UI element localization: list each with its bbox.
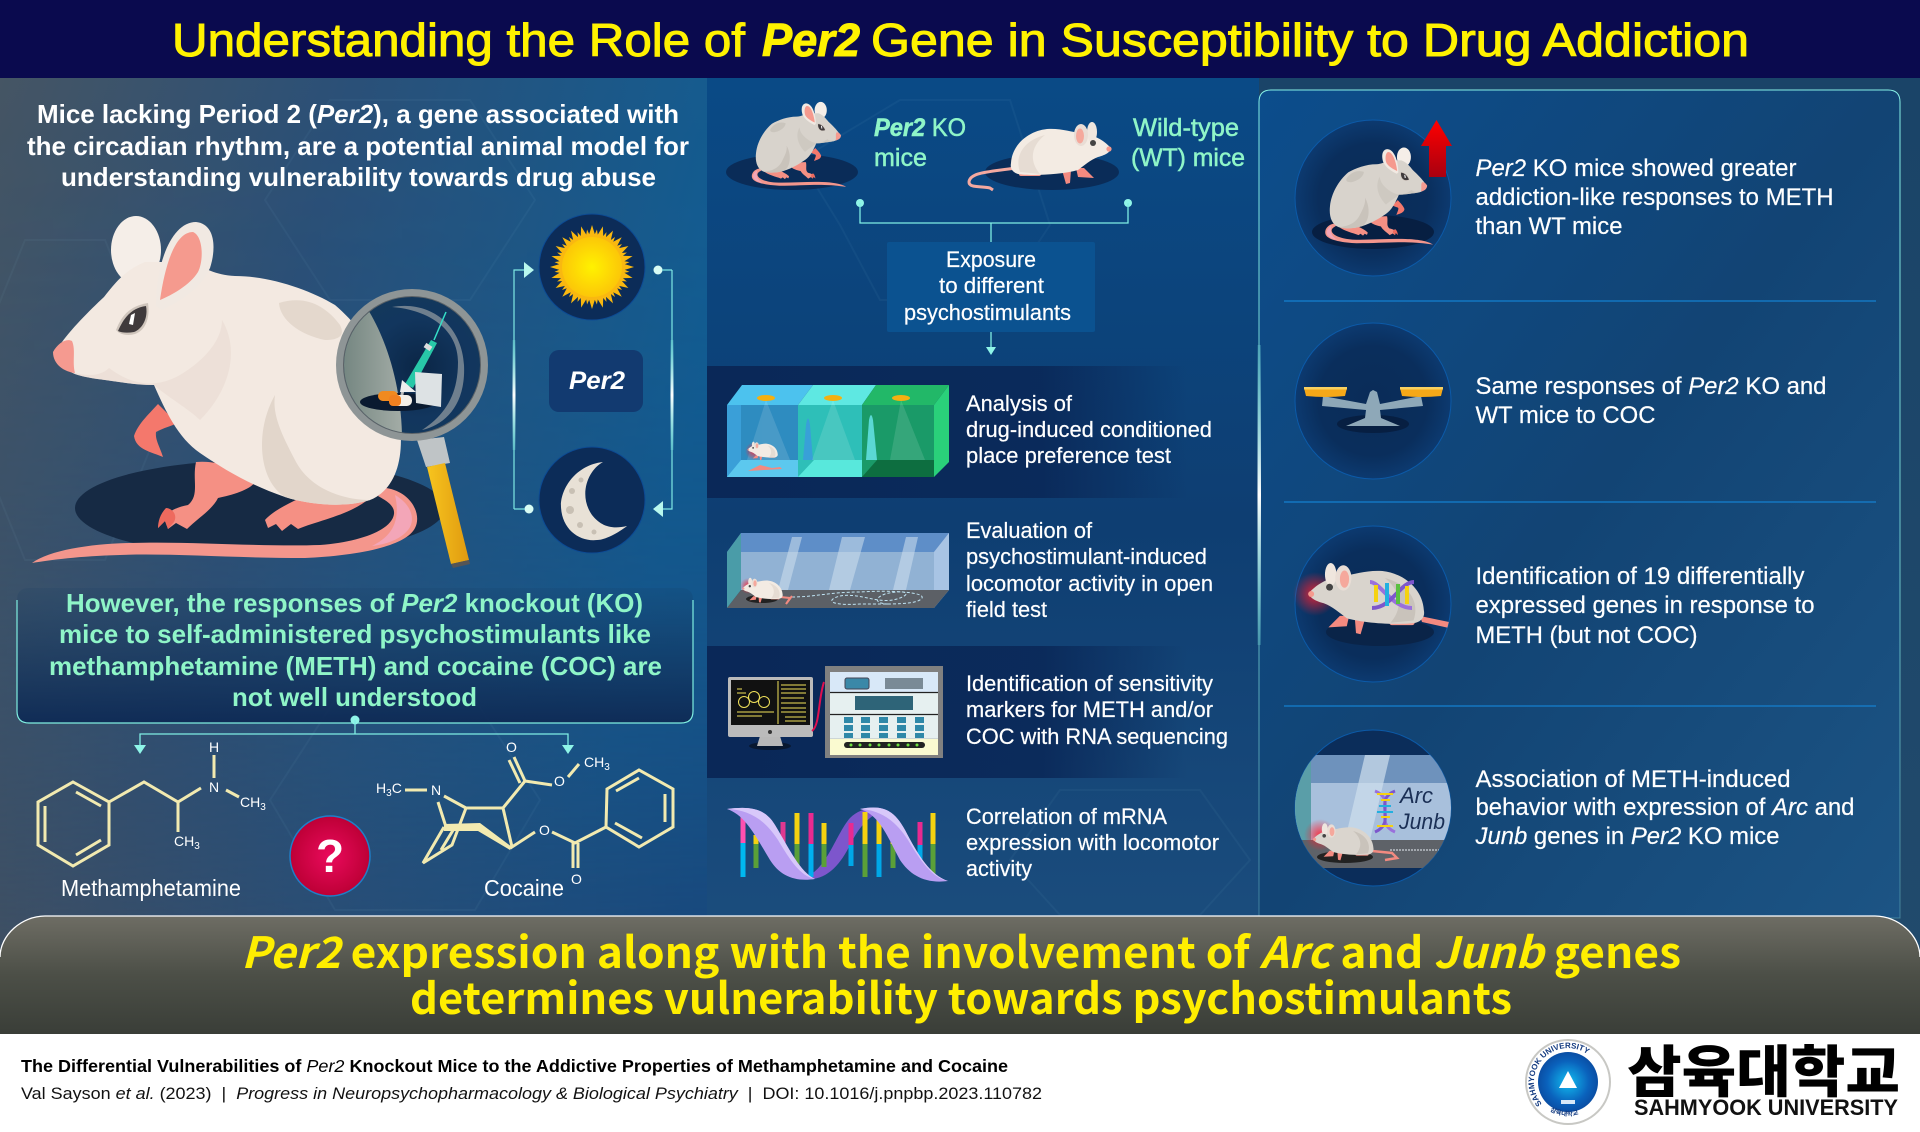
methamphetamine structure: CH [174, 833, 194, 849]
row text: markers for METH and/or [966, 697, 1213, 722]
row text: field test [966, 597, 1047, 622]
icon: balance scale [1295, 323, 1451, 479]
panel row: RNA sequencing [707, 646, 1228, 778]
wild-type mouse [969, 122, 1119, 190]
connector to molecules [134, 716, 574, 754]
row text: activity [966, 856, 1032, 881]
wild-type label [1131, 114, 1245, 172]
result text [1476, 373, 1826, 429]
result text: Association of METH-induced [1476, 766, 1790, 793]
university seal: SAHMYOOK UNIVERSITY [1528, 1042, 1590, 1106]
result text: Identification of 19 differentially [1476, 563, 1804, 590]
question mark [290, 816, 370, 896]
result text: Per2 KO mice showed greater [1476, 155, 1796, 182]
row text [966, 804, 1219, 881]
result text [1476, 563, 1814, 649]
result 2: same response [1295, 323, 1826, 479]
cocaine structure: O [506, 739, 517, 755]
row text: COC with RNA sequencing [966, 724, 1228, 749]
drugs: syringe, bag, pills [360, 312, 446, 411]
bracket connector [856, 199, 1132, 243]
computer monitor [728, 677, 813, 750]
cocaine label: Cocaine [484, 875, 564, 901]
knockout question box: not well understood [232, 682, 477, 712]
intro text [27, 99, 689, 192]
row text: expression with locomotor [966, 830, 1219, 855]
result text: behavior with expression of Arc and [1476, 794, 1854, 821]
methamphetamine structure [38, 739, 266, 866]
conclusion banner [0, 916, 1920, 1034]
intro text: the circadian rhythm, are a potential animal model for [27, 131, 689, 161]
cocaine structure: N [431, 782, 441, 798]
title [172, 14, 1749, 66]
result text: Same responses of Per2 KO and [1476, 373, 1826, 400]
result text: than WT mice [1476, 213, 1622, 240]
title: Per2 [762, 14, 860, 66]
result text: addiction-like responses to METH [1476, 184, 1834, 211]
cocaine structure: CH [584, 754, 604, 770]
exposure box: to different [939, 273, 1044, 298]
icon: mouse in open field with genes: Arc [1398, 783, 1433, 808]
university wordmark: 삼육대학교 [1627, 1028, 1900, 1109]
result 1: greater addiction [1295, 120, 1834, 276]
Per2 KO mouse [726, 102, 858, 190]
row text: psychostimulant-induced [966, 544, 1207, 569]
cycle left arrow [512, 262, 534, 514]
panel: results [1258, 90, 1900, 918]
row text: locomotor activity in open [966, 571, 1213, 596]
wild-type label: (WT) mice [1131, 144, 1245, 172]
result 4: Arc Junb [1295, 730, 1854, 886]
mouse shadow [75, 460, 445, 556]
result text [1476, 155, 1834, 240]
knockout question box: mice to self-administered psychostimulants like [59, 619, 651, 649]
sequencing machine [728, 666, 943, 758]
exposure box [887, 242, 1095, 332]
result text: Junb genes in Per2 KO mice [1475, 823, 1780, 850]
exposure box: Exposure [946, 247, 1036, 272]
cocaine structure [376, 739, 673, 887]
row text [966, 391, 1212, 468]
icon: sun [539, 214, 645, 320]
row text: place preference test [966, 443, 1171, 468]
row text: Analysis of [966, 391, 1073, 416]
methamphetamine structure: H [209, 739, 219, 755]
panel row: conditioned place preference [707, 366, 1212, 498]
knockout question box [17, 588, 693, 723]
wild-type label: Wild-type [1133, 114, 1239, 142]
methamphetamine structure: 3 [260, 802, 266, 813]
methamphetamine structure: 3 [194, 841, 200, 852]
cocaine structure: H [376, 780, 386, 796]
row text: Correlation of mRNA [966, 804, 1167, 829]
white mouse [32, 216, 417, 563]
mRNA helix [727, 808, 948, 882]
university wordmark: SAHMYOOK UNIVERSITY [1634, 1095, 1898, 1120]
title: Understanding the Role of [172, 14, 745, 66]
icon: mouse in open field with genes [1295, 730, 1451, 886]
mouse groups header [726, 102, 1245, 190]
cocaine structure: O [571, 871, 582, 887]
header bar [0, 0, 1920, 78]
icon: mouse in open field with genes: Junb [1398, 809, 1445, 834]
arrow to tests [986, 332, 996, 355]
day/night cycle diagram [512, 214, 674, 553]
result text: expressed genes in response to [1476, 592, 1814, 619]
cocaine structure: O [539, 822, 550, 838]
title: Gene in Susceptibility to Drug Addiction [871, 14, 1749, 66]
icon: moon [539, 447, 645, 553]
chamber apparatus [727, 385, 949, 477]
row text: drug-induced conditioned [966, 417, 1212, 442]
magnifier handle [417, 437, 470, 568]
footer citation: The Differential Vulnerabilities of Per2 Knockout Mice to the Addictive Properties of Methamphetamine and Cocaine [21, 1056, 1008, 1076]
cocaine structure: C [392, 780, 402, 796]
intro text: understanding vulnerability towards drug abuse [61, 162, 656, 192]
footer citation: Val Sayson et al. (2023) | Progress in Neuropsychopharmacology & Biological Psychiatry | DOI: 10.1016/j.pnpbp.2023.110782 [21, 1084, 1042, 1103]
row text [966, 671, 1228, 749]
row text: Identification of sensitivity [966, 671, 1213, 696]
cycle right arrow [653, 266, 674, 517]
cocaine structure: 3 [386, 788, 392, 799]
Per2 KO label [874, 114, 966, 172]
Per2 KO label: mice [874, 144, 927, 172]
result text: METH (but not COC) [1476, 622, 1698, 649]
footer citation [21, 1056, 1042, 1103]
knockout question box: methamphetamine (METH) and cocaine (COC) are [49, 651, 662, 681]
row text [966, 518, 1213, 622]
result text [1475, 766, 1854, 850]
magnifier lens [336, 289, 488, 441]
icon: KO mouse with up arrow [1295, 120, 1452, 276]
methamphetamine structure: CH [240, 794, 260, 810]
university seal: 삼육대학교 [1550, 1107, 1578, 1117]
exposure box: psychostimulants [904, 300, 1071, 325]
icon: mouse with DNA [1293, 526, 1451, 682]
row text: Evaluation of [966, 518, 1093, 543]
result 3: differential genes [1293, 526, 1814, 682]
panel row: mRNA correlation [727, 804, 1219, 882]
Per2 KO label: Per2 KO [874, 114, 966, 142]
open field box [727, 533, 949, 608]
methamphetamine label: Methamphetamine [61, 875, 241, 901]
question mark: ? [316, 830, 344, 882]
cocaine structure: 3 [604, 762, 610, 773]
page background [0, 78, 1920, 950]
conclusion banner: determines vulnerability towards psychostimulants [410, 965, 1512, 1027]
Per2 label [549, 350, 643, 412]
conclusion banner: Per2 expression along with the involvement of Arc and Junb genes [241, 919, 1681, 981]
methamphetamine structure: N [209, 779, 219, 795]
Per2 label: Per2 [569, 367, 625, 395]
panel row: open field test [727, 518, 1213, 622]
cocaine structure: O [554, 773, 565, 789]
knockout question box: However, the responses of Per2 knockout (KO) [66, 588, 643, 618]
big mouse with magnifier [32, 216, 488, 568]
university seal [1525, 1039, 1611, 1125]
result text: WT mice to COC [1476, 402, 1656, 429]
intro text: Mice lacking Period 2 (Per2), a gene associated with [37, 99, 679, 129]
